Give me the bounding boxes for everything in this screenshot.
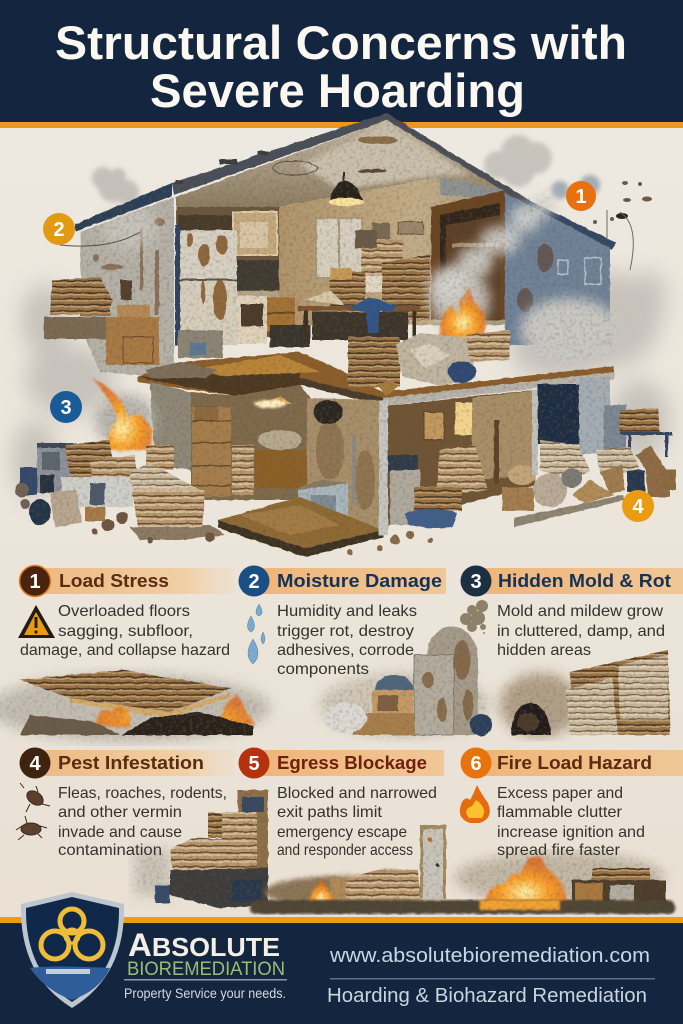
number badge 5: 5: [248, 753, 260, 775]
icon: mold spores: [460, 600, 488, 634]
flying insects: [593, 181, 652, 270]
marker 4: 4: [632, 496, 644, 518]
company name: [124, 927, 287, 1001]
doorway: [431, 190, 505, 320]
rubble strip above footer: [250, 900, 675, 914]
marker 2: 2: [53, 219, 65, 241]
roof: [75, 113, 616, 250]
body text: [20, 603, 230, 659]
number badge 6: 6: [470, 753, 482, 775]
number badge 2: 2: [248, 571, 260, 593]
body text: [277, 603, 417, 678]
logo shield: [21, 892, 124, 1008]
ground band and rubble: [92, 495, 625, 555]
number badge 2: [238, 566, 270, 596]
heading: Pest Infestation: [58, 752, 204, 773]
tagline: Hoarding & Biohazard Remediation: [327, 985, 647, 1007]
body text: Fleas, roaches, rodents,: [58, 785, 227, 802]
refrigerator: [175, 225, 237, 345]
body text: flammable clutter: [497, 804, 623, 821]
number badge 5: [238, 748, 270, 778]
right outdoor pile: [533, 405, 676, 507]
ceiling: [176, 120, 505, 207]
illustration: exit door and rubble: [265, 825, 446, 908]
body text: and responder access: [277, 842, 413, 859]
left outdoor pile and fire: [15, 378, 205, 528]
body text: increase ignition and: [497, 824, 645, 841]
body text: [497, 603, 665, 659]
title: [55, 16, 627, 117]
header banner: [0, 0, 683, 128]
heading band: [476, 568, 683, 594]
number badge 4: 4: [29, 753, 41, 775]
body text: [277, 785, 437, 859]
wall under left slab: [150, 382, 191, 470]
heading: Fire Load Hazard: [497, 752, 652, 773]
hanging lamp: [328, 172, 364, 206]
illustration: burning clutter: [455, 852, 666, 908]
cabinet and papers left exterior: [44, 277, 159, 365]
illustration: mold hole and paper stacks: [500, 650, 670, 737]
lower left room: [191, 385, 379, 530]
kitchen counter and stove: [237, 296, 310, 347]
kitchen flame: [430, 268, 490, 338]
marker 4: [622, 490, 654, 522]
icon: warning triangle: [18, 605, 55, 638]
smoke clouds behind house: [13, 135, 670, 500]
body text: Humidity and leaks: [277, 603, 417, 620]
number badge 6: [460, 748, 492, 778]
heading band: [35, 568, 235, 594]
body text: Mold and mildew grow: [497, 603, 663, 620]
dark storage room: [538, 378, 610, 480]
body text: in cluttered, damp, and: [497, 623, 665, 640]
marker 1: 1: [575, 186, 587, 208]
title: Severe Hoarding: [150, 64, 525, 117]
body text: trigger rot, destroy: [277, 623, 414, 640]
house illustration: [15, 113, 676, 557]
body text: hidden areas: [497, 642, 591, 659]
website: www.absolutebioremediation.com: [329, 944, 650, 967]
body text: adhesives, corrode: [277, 642, 414, 659]
left exterior wall: [80, 197, 174, 378]
body text: spread fire faster: [497, 842, 621, 859]
marker 1: [566, 181, 596, 211]
upper floor slab: [137, 352, 614, 406]
body text: sagging, subfloor,: [58, 623, 193, 640]
rising smoke: [430, 193, 555, 303]
body text: Excess paper and: [497, 785, 623, 802]
heading band: [35, 750, 235, 776]
marker 3: [50, 391, 82, 423]
panel: pest infestation: [16, 748, 235, 859]
biohazard symbol: [41, 909, 103, 959]
marker 2: [43, 213, 140, 246]
heading band: [254, 750, 444, 776]
body text: Blocked and narrowed: [277, 785, 437, 802]
panel: egress blockage: [238, 748, 444, 859]
floor piles upper level: [145, 330, 510, 396]
title: Structural Concerns with: [55, 16, 627, 69]
body text: and other vermin: [58, 804, 182, 821]
heading: Load Stress: [59, 570, 169, 591]
right interior wall: [279, 177, 505, 325]
body text: contamination: [58, 842, 162, 859]
body text: emergency escape: [277, 824, 407, 841]
lower floor: [218, 497, 383, 557]
body text: invade and cause: [58, 824, 182, 841]
icon: beetle: [20, 783, 50, 812]
icon: roach: [16, 816, 47, 840]
illustration: collapsed floor: [0, 670, 270, 742]
number badge 1: 1: [29, 571, 41, 593]
heading band: [476, 750, 683, 776]
body text: [58, 785, 227, 859]
right lower room: [379, 390, 538, 535]
panel: hidden mold and rot: [460, 566, 683, 659]
heading: Egress Blockage: [277, 752, 427, 773]
heading: Moisture Damage: [277, 570, 442, 591]
air conditioner unit: [298, 480, 348, 527]
heading: Hidden Mold & Rot: [498, 570, 671, 591]
number badge 3: 3: [470, 571, 482, 593]
icon: flame: [460, 785, 490, 823]
body text: components: [277, 661, 369, 678]
company name: BIOREMEDIATION: [127, 959, 285, 980]
icon: water drops: [248, 604, 265, 664]
right exterior wall: [505, 193, 610, 345]
body text: damage, and collapse hazard: [20, 642, 230, 659]
table with blue cloth: [298, 290, 420, 346]
company name: ABSOLUTE: [128, 927, 280, 963]
number badge 3: [460, 566, 492, 596]
panel: moisture damage: [238, 566, 446, 678]
paper stacks upper room: [330, 230, 430, 320]
illustration: blocked shelf and desk: [135, 790, 268, 908]
body text: [497, 785, 645, 859]
company name: Property Service your needs.: [124, 985, 286, 1001]
body text: exit paths limit: [277, 804, 383, 821]
body text: Overloaded floors: [58, 603, 190, 620]
number badge 4: [20, 748, 50, 778]
panel: load stress: [18, 566, 235, 659]
marker 3: 3: [60, 397, 72, 419]
right wall stains and smoke: [517, 244, 620, 362]
footer: [0, 892, 683, 1024]
illustration: damaged fridge and appliances: [320, 627, 492, 737]
panel: fire load hazard: [460, 748, 683, 859]
number badge 1: [20, 566, 50, 596]
kitchen back wall: [176, 207, 297, 337]
heading band: [254, 568, 446, 594]
